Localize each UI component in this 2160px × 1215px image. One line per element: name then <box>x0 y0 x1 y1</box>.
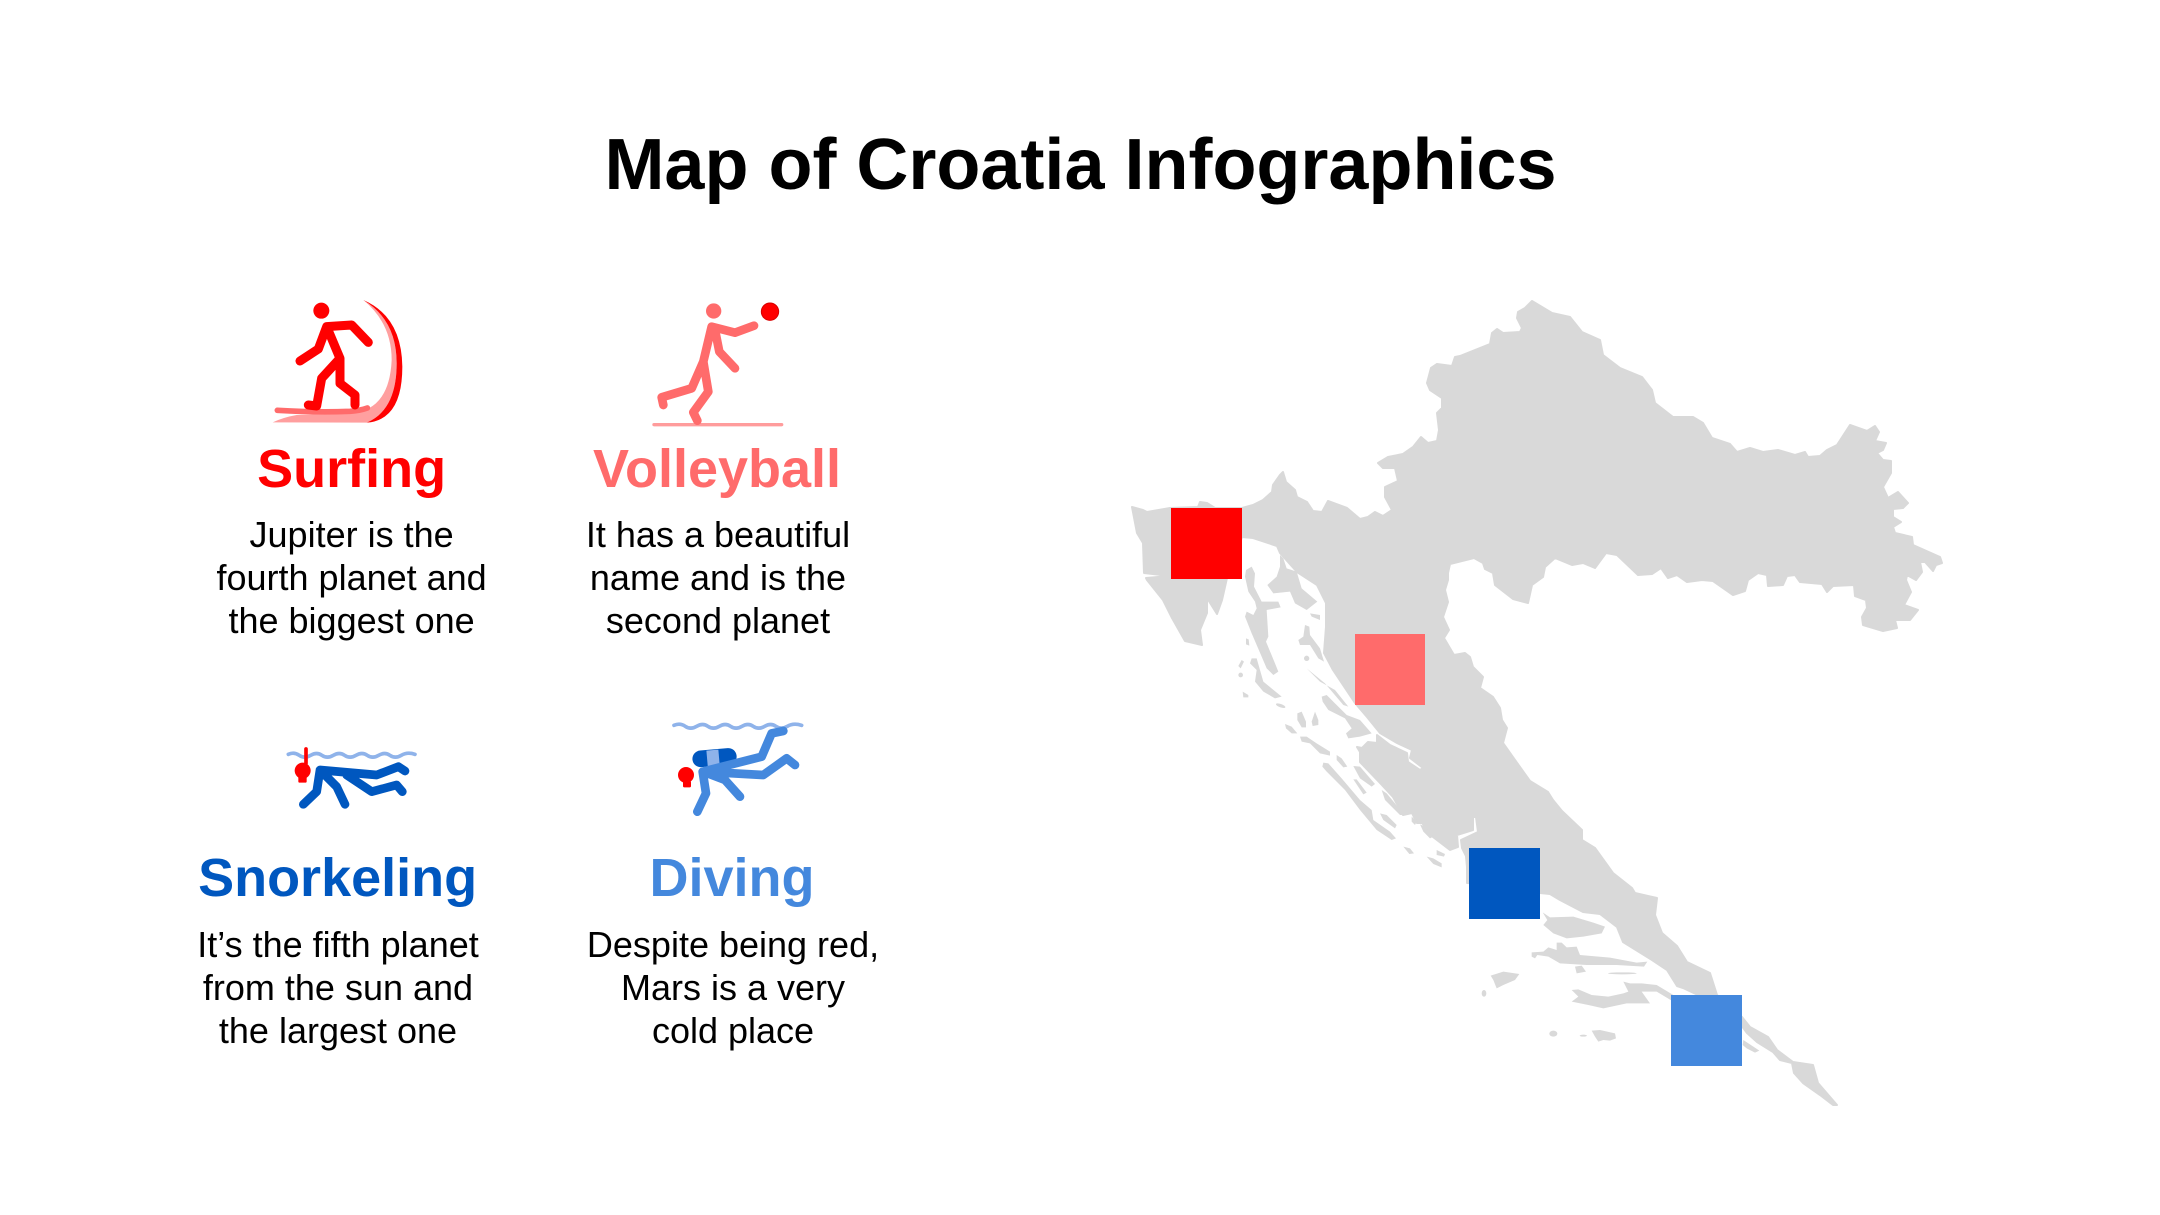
icon: diver <box>674 724 802 812</box>
title: Map of Croatia Infographics <box>604 125 1557 205</box>
text: volleyball description: second planet <box>606 600 830 641</box>
icon: snorkeler <box>288 749 415 804</box>
map: mainland <box>1132 301 1942 1105</box>
panel: diving <box>587 724 879 1051</box>
panel: surfing <box>216 300 487 641</box>
heading: surfing: Surfing <box>257 439 446 499</box>
heading: snorkeling: Snorkeling <box>198 848 477 908</box>
marker: diving location <box>1671 995 1742 1066</box>
icon: volleyball player <box>654 303 782 425</box>
text: surfing description: Jupiter is the <box>250 514 454 555</box>
map of Croatia <box>1132 301 1942 1105</box>
text: snorkeling description: the largest one <box>219 1010 457 1051</box>
text: surfing description <box>216 514 487 641</box>
panel: snorkeling <box>197 749 479 1051</box>
text: diving description: cold place <box>652 1010 814 1051</box>
text: diving description <box>587 924 879 1051</box>
text: snorkeling description: from the sun and <box>203 967 473 1008</box>
map: northern islands <box>1238 555 1324 698</box>
marker: surfing location <box>1171 508 1242 579</box>
text: snorkeling description <box>197 924 479 1051</box>
marker: snorkeling location <box>1469 848 1540 919</box>
heading: volleyball: Volleyball <box>593 439 841 499</box>
map: southern islands <box>1482 912 1759 1053</box>
panel: volleyball <box>586 303 850 641</box>
text: surfing description: the biggest one <box>228 600 475 641</box>
text: snorkeling description: It’s the fifth planet <box>197 924 479 965</box>
heading: diving: Diving <box>649 848 815 908</box>
text: volleyball description <box>586 514 850 641</box>
text: volleyball description: name and is the <box>590 557 846 598</box>
text: diving description: Mars is a very <box>621 967 845 1008</box>
marker: volleyball location <box>1355 634 1425 705</box>
text: volleyball description: It has a beautiful <box>586 514 850 555</box>
icon: surfer <box>273 300 402 423</box>
map: central islands <box>1275 668 1445 867</box>
text: diving description: Despite being red, <box>587 924 879 965</box>
text: surfing description: fourth planet and <box>216 557 487 598</box>
